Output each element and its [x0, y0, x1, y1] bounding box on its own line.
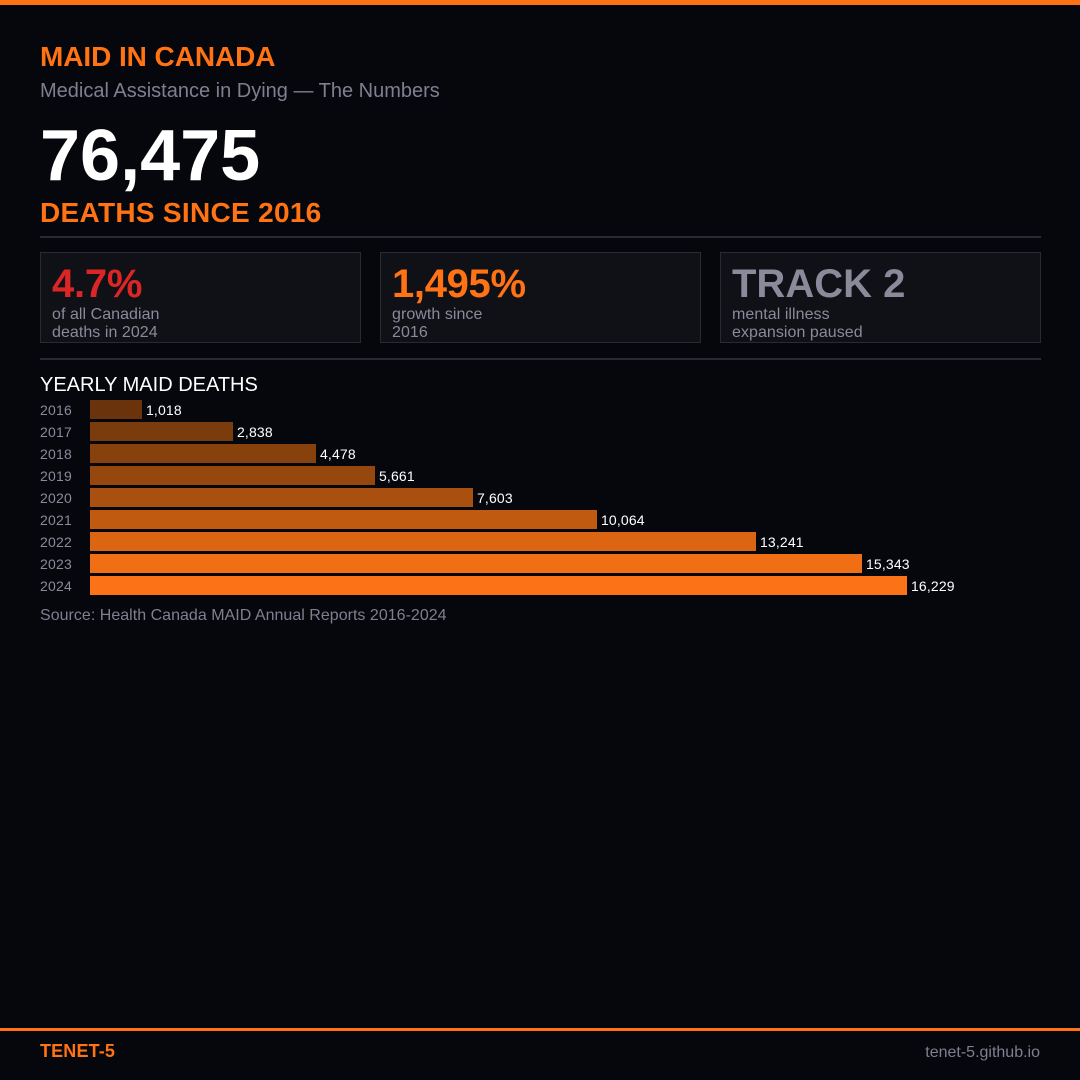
- chart heading: YEARLY MAID DEATHS: [40, 374, 258, 396]
- stat label: growth: 2016: [392, 324, 428, 341]
- bar: 2021: 2021: [40, 512, 72, 528]
- stat label: share of deaths: deaths in 2024: [52, 324, 158, 341]
- title: MAID IN CANADA: [40, 41, 275, 72]
- bar: 2022: [40, 532, 804, 551]
- subtitle: Medical Assistance in Dying — The Numbers: [40, 80, 440, 102]
- stat label: share of deaths: of all Canadian: [52, 306, 160, 323]
- bar: 2024: [40, 576, 955, 595]
- bar: 2018: 2018: [40, 446, 72, 462]
- stat label: Track 2: expansion paused: [732, 324, 863, 341]
- stat value: 1,495%: 1,495%: [392, 262, 526, 306]
- bar: 2023: [40, 554, 910, 573]
- stat value: Track 2: TRACK 2: [732, 262, 905, 306]
- bar: 2018: 4,478: [320, 446, 356, 462]
- headline caption: DEATHS SINCE 2016: [40, 197, 322, 228]
- stat label: growth: [392, 306, 482, 341]
- stat label: share of deaths: [52, 306, 160, 341]
- bar: 2017: [40, 422, 273, 441]
- bar: 2016: [40, 400, 182, 419]
- bar: 2020: 7,603: [477, 490, 513, 506]
- bar: 2021: [40, 510, 645, 529]
- bar chart: yearly MAID deaths: [40, 400, 955, 595]
- bar: 2018: [40, 444, 356, 463]
- bar: 2019: [40, 466, 415, 485]
- bar: 2022: 13,241: [760, 534, 804, 550]
- stat value: 4.7%: 4.7%: [52, 262, 142, 306]
- footer link: tenet-5.github.io: [925, 1044, 1040, 1061]
- bar: 2022: 2022: [40, 534, 72, 550]
- bar: 2020: [40, 488, 513, 507]
- top accent bar: [0, 0, 1080, 5]
- panel: share of deaths: [40, 252, 361, 343]
- bar: 2024: 16,229: [911, 578, 955, 594]
- bar: 2017: 2017: [40, 424, 72, 440]
- bar: 2024: 2024: [40, 578, 72, 594]
- bar: 2020: 2020: [40, 490, 72, 506]
- bar: 2023: 15,343: [866, 556, 910, 572]
- source note: Source: Health Canada MAID Annual Reports 2016-2024: [40, 607, 447, 624]
- stat label: Track 2: mental illness: [732, 306, 830, 323]
- footer brand: TENET-5: [40, 1041, 115, 1061]
- bar: 2016: 2016: [40, 402, 72, 418]
- headline number: 76,475: [40, 116, 260, 196]
- bar: 2019: 2019: [40, 468, 72, 484]
- bar: 2023: 2023: [40, 556, 72, 572]
- bar: 2016: 1,018: [146, 402, 182, 418]
- bar: 2021: 10,064: [601, 512, 645, 528]
- panel: growth: [380, 252, 701, 343]
- bar: 2019: 5,661: [379, 468, 415, 484]
- bar: 2017: 2,838: [237, 424, 273, 440]
- stat label: growth: growth since: [392, 306, 482, 323]
- panel: track 2: [720, 252, 1041, 343]
- footer rule: [0, 1028, 1080, 1031]
- stat label: Track 2: [732, 306, 863, 341]
